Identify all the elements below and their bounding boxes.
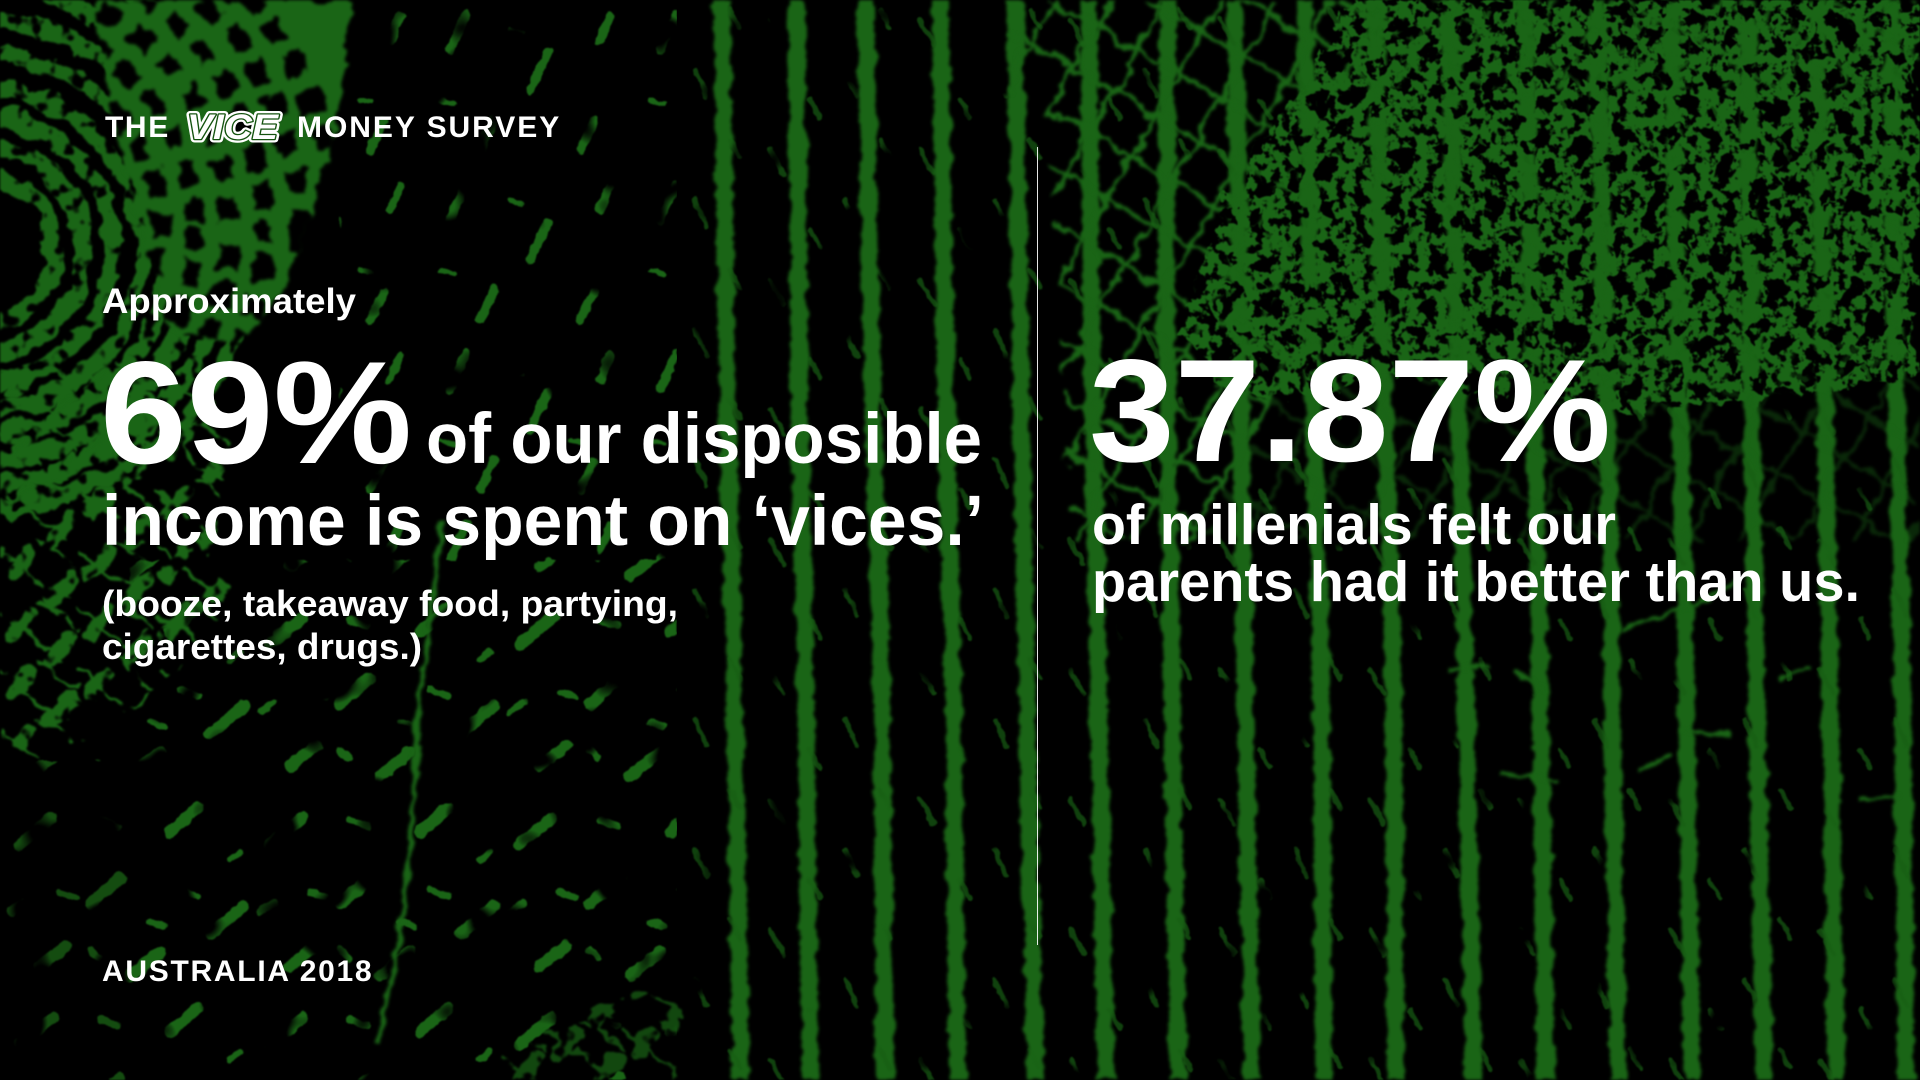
masthead: The VICE Money Survey: [105, 108, 560, 147]
background: top-left fingerprint mesh: [93, 0, 356, 344]
icon: VICE logo: VICE: [187, 108, 280, 147]
icon: VICE logo: VICE: [187, 108, 280, 147]
left stat block: [100, 282, 984, 667]
background: faint dashes between stripes: [677, 0, 1920, 1080]
left stat block: cigarettes, drugs.): [102, 626, 422, 667]
background: large right fingerprint mesh: [1176, 0, 1920, 418]
background: branching marks on lower right: [1450, 580, 1900, 800]
background: lattice over top of right panel: [1010, 0, 1920, 540]
background: top-left fingerprint rings: [0, 0, 258, 508]
headline line 2: income is spent on ‘vices.’: [102, 482, 984, 561]
masthead: The VICE Money Survey: THE: [105, 111, 169, 144]
background: diagonal dash texture left: [0, 0, 677, 1080]
big number 37.87%: 37.87%: [1089, 329, 1611, 492]
description line 2: parents had it better than us.: [1092, 550, 1860, 614]
divider line: [1037, 147, 1038, 945]
big number 69%: 69%: [100, 331, 412, 494]
background: thin vertical line: [377, 520, 441, 1045]
parenthetical list: (booze, takeaway food, partying,: [102, 583, 678, 624]
background: lower-left fingerprint lattice: [0, 360, 677, 1080]
right stat block: [1089, 329, 1860, 614]
footer: Australia 2018: AUSTRALIA 2018: [102, 955, 372, 988]
background: vertical stripes: [722, 0, 1906, 1080]
headline line 1: of our disposible: [426, 400, 982, 479]
description line 1: of millenials felt our: [1092, 493, 1616, 557]
lead-in text: Approximately: [102, 282, 357, 321]
masthead: The VICE Money Survey: MONEY SURVEY: [297, 111, 560, 144]
